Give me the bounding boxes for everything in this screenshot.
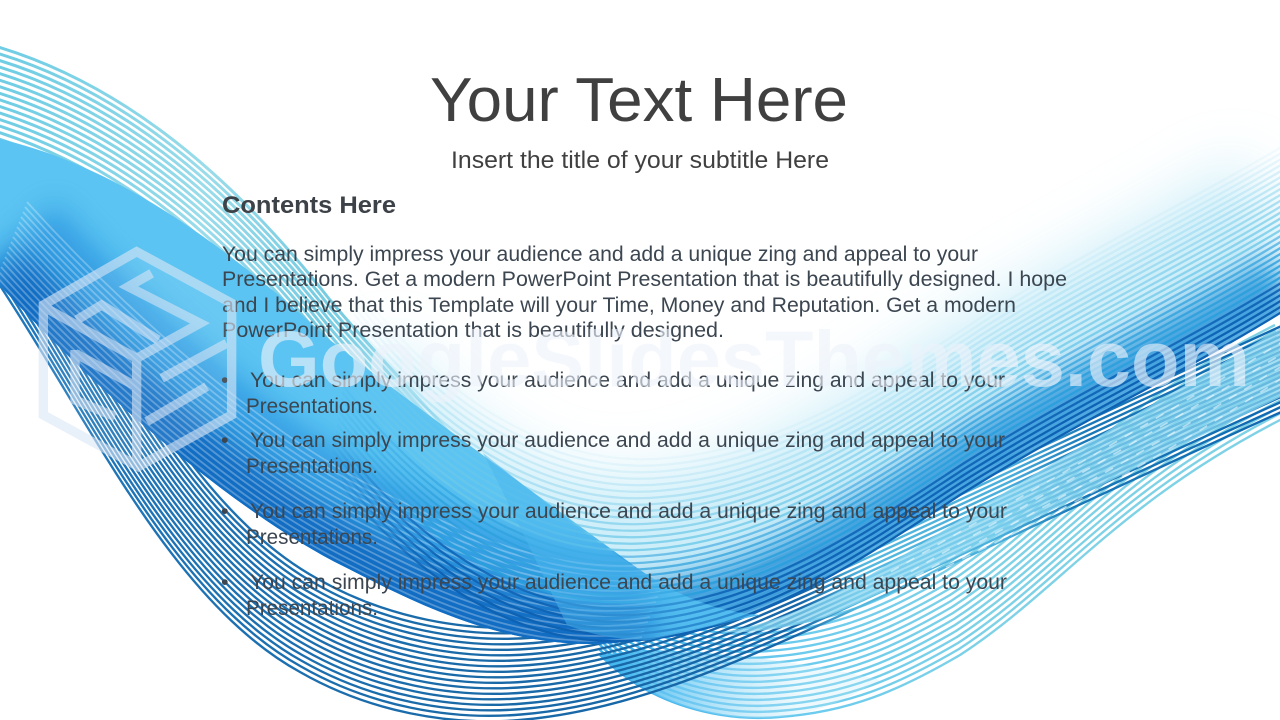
wave: bottom light blue tip — [600, 650, 880, 718]
wave: dark outer line band — [0, 184, 1280, 720]
bullet 1: • — [221, 368, 229, 392]
body paragraph: PowerPoint Presentation that is beautifully designed. — [222, 318, 724, 342]
body paragraph: Presentations. Get a modern PowerPoint Presentation that is beautifully designed. I hope — [222, 267, 1067, 291]
bullet 4: You can simply impress your audience and add a unique zing and appeal to your — [250, 570, 1007, 594]
watermark: site name: GoogleSlidesThemes.com — [258, 314, 1250, 403]
subtitle: Insert the title of your subtitle Here — [451, 147, 829, 174]
body paragraph — [222, 242, 1067, 342]
bullet 2 — [221, 428, 1005, 478]
bullet 4: Presentations. — [246, 596, 378, 620]
bullet 2: • — [221, 428, 229, 452]
bullet 3: You can simply impress your audience and add a unique zing and appeal to your — [250, 499, 1007, 523]
bullet 3 — [221, 499, 1007, 549]
wave: right band soft fill — [330, 235, 1280, 617]
bullet 3: Presentations. — [246, 525, 378, 549]
wave: translucent ribbon over lines — [483, 453, 760, 640]
title: Your Text Here — [430, 66, 848, 135]
wave: right band lines — [330, 128, 1280, 641]
bullet 2: Presentations. — [246, 454, 378, 478]
bullet 1: You can simply impress your audience and add a unique zing and appeal to your — [250, 368, 1005, 392]
watermark: cube logo — [43, 252, 232, 467]
bullet list — [221, 368, 1007, 620]
bullet 4 — [221, 570, 1007, 620]
bullet 3: • — [221, 499, 229, 523]
wave: right sheet dashes — [860, 340, 1280, 590]
contents heading: Contents Here — [222, 192, 396, 219]
bullet 1: Presentations. — [246, 394, 378, 418]
wave: left blue sheet — [0, 130, 775, 660]
bullet 4: • — [221, 570, 229, 594]
bullet 2: You can simply impress your audience and add a unique zing and appeal to your — [250, 428, 1005, 452]
body paragraph: You can simply impress your audience and add a unique zing and appeal to your — [222, 242, 978, 266]
body paragraph: and I believe that this Template will your Time, Money and Reputation. Get a modern — [222, 293, 1016, 317]
wave: lower right light line band — [585, 325, 1280, 718]
bullet 1 — [221, 368, 1005, 418]
wave: right light blue sheet — [720, 325, 1280, 632]
wave: top left light line band — [0, 46, 500, 580]
